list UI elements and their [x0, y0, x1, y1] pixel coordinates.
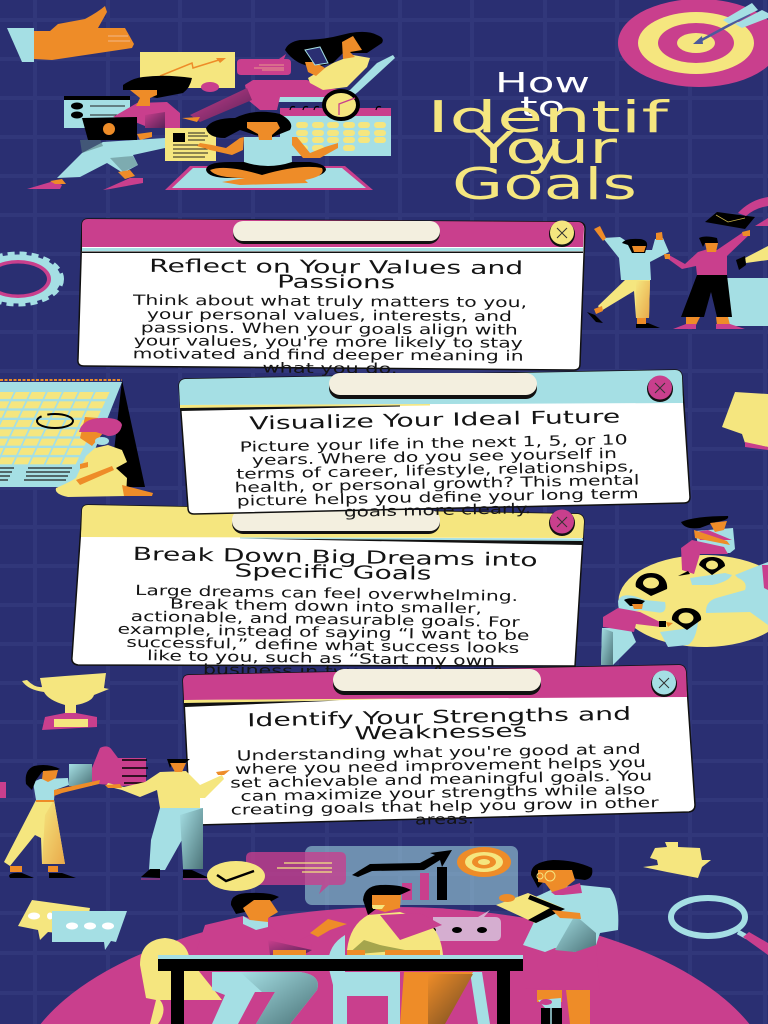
calendar with clock: [280, 91, 391, 156]
illustration: team working on goals: [27, 32, 395, 190]
card text: like to you, such as “Start my own: [147, 648, 495, 670]
close button: [647, 376, 673, 402]
illustration: team meeting: [41, 846, 749, 1024]
card text: motivated and find deeper meaning in: [133, 346, 524, 365]
yellow chair: [140, 938, 222, 1024]
icon: magnifying glass: [671, 898, 768, 955]
card text: creating goals that help you grow in other: [231, 795, 659, 819]
woman with laptop: [27, 76, 192, 190]
card text: [117, 544, 538, 683]
card text: example, instead of saying “I want to be: [117, 622, 530, 644]
card text: years. Where do you see yourself in: [252, 446, 617, 469]
card text: Understanding what you're good at and: [237, 741, 641, 765]
meditating woman on mat: [165, 112, 373, 190]
icon: yellow shape: [722, 392, 768, 450]
card text: Visualize Your Ideal Future: [249, 406, 620, 435]
man placing pin: [601, 598, 673, 665]
check badge: [207, 861, 265, 891]
title: [427, 66, 671, 210]
icon: fist at edge: [0, 782, 6, 798]
card text: areas.: [415, 811, 474, 828]
thumbs up: [69, 746, 148, 786]
card text: terms of career, lifestyle, relationships,: [236, 459, 634, 483]
card text: Specific Goals: [234, 560, 432, 585]
woman on globe: [678, 516, 735, 576]
standing woman with clipboard: [496, 860, 618, 1024]
speech bubble with lines: [246, 852, 346, 894]
title: How: [495, 66, 590, 99]
box: [726, 278, 768, 326]
document: [165, 128, 216, 161]
illustration: globe with pins: [601, 516, 768, 665]
card text: Think about what truly matters to you,: [131, 293, 527, 311]
card text: Identify Your Strengths and: [247, 704, 631, 731]
title: to: [520, 90, 565, 123]
card text: picture helps you define your long term: [237, 486, 639, 510]
card text: set achievable and meaningful goals. You: [230, 768, 652, 792]
panel: reflect on values: [78, 219, 585, 378]
panel: visualize ideal future: [179, 370, 690, 523]
icon: gear: [0, 254, 62, 304]
window pill: [333, 672, 541, 695]
card text: Picture your life in the next 1, 5, or 10: [240, 432, 628, 456]
card text: can maximize your strengths while also: [240, 782, 646, 805]
icon: pointing hand: [7, 6, 134, 62]
map pins: [636, 557, 725, 630]
person in magenta top: [664, 230, 750, 329]
illustration: people with thumbs up: [4, 746, 230, 879]
title: Identif: [427, 92, 671, 143]
card text: health, or personal growth? This mental: [234, 473, 640, 496]
illustration: celebrating pair: [587, 197, 768, 329]
card text: where you need improvement helps you: [235, 755, 646, 778]
chat bubble with dots: [426, 910, 501, 941]
card text: your personal values, interests, and: [147, 307, 512, 325]
panel: break down dreams: [72, 505, 584, 683]
title: Goals: [452, 159, 637, 210]
card text: what you do.: [263, 361, 398, 377]
card text: Passions: [277, 272, 395, 293]
window pill: [329, 376, 537, 399]
card text: [229, 703, 659, 832]
card text: actionable, and measurable goals. For: [131, 609, 520, 631]
window pill: [233, 222, 440, 244]
seated woman: [328, 885, 490, 1024]
briefcase and third person: [705, 197, 768, 270]
seated woman: [56, 417, 153, 497]
icon: trophy: [22, 673, 109, 730]
close button: [549, 220, 575, 247]
card text: [233, 406, 640, 523]
card text: successful,” define what success looks: [126, 635, 519, 657]
chart panel: [305, 846, 518, 905]
icon: puzzle piece: [643, 842, 711, 878]
person in blue top: [587, 226, 669, 328]
close button: [549, 510, 575, 536]
card text: Reflect on Your Values and: [149, 256, 523, 279]
speech bubble: [237, 54, 291, 75]
meeting table: [158, 955, 523, 1024]
illustration: calendar with seated woman: [0, 380, 153, 497]
seated man: [195, 893, 347, 1024]
card text: business in two years.”: [203, 662, 443, 682]
card text: Weaknesses: [354, 720, 528, 744]
card text: Break them down into smaller,: [170, 596, 482, 617]
icon: target with arrow: [618, 0, 768, 87]
man: [105, 759, 230, 879]
card text: your values, you're more likely to stay: [134, 333, 523, 352]
card text: goals more clearly.: [344, 501, 531, 521]
panel: identify strengths: [183, 665, 695, 832]
card text: passions. When your goals align with: [141, 320, 518, 339]
title: y: [526, 125, 562, 176]
card text: Break Down Big Dreams into: [133, 544, 538, 571]
window pill: [232, 512, 440, 534]
close button: [651, 670, 677, 697]
reclining woman with phone: [182, 32, 395, 122]
icon: chat bubbles: [18, 900, 127, 950]
growth chart board: [140, 52, 235, 92]
checklist window: [64, 96, 130, 128]
card text: [131, 256, 527, 378]
title: Your: [471, 123, 618, 174]
woman: [4, 765, 100, 878]
card text: Large dreams can feel overwhelming.: [135, 583, 518, 605]
